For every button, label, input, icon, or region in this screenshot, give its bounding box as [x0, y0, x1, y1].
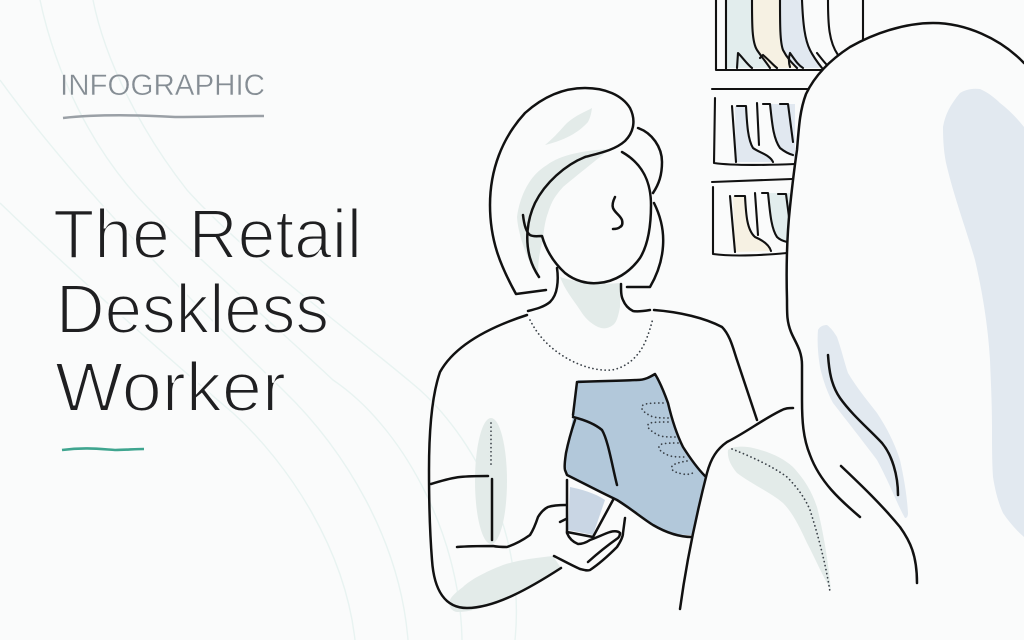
shadow: neck — [560, 277, 620, 328]
boot being held — [565, 373, 705, 537]
shopper figure — [429, 88, 757, 612]
body outline right — [654, 310, 757, 420]
shadow: sleeve — [475, 418, 507, 544]
necklace dotted — [530, 318, 653, 370]
customer arm — [680, 408, 831, 609]
middle shelf — [712, 89, 808, 165]
boot outline — [573, 374, 705, 476]
boot heel fill — [568, 487, 605, 535]
shelves with boots — [712, 0, 863, 256]
stitching — [642, 403, 693, 474]
title: Worker — [55, 348, 286, 426]
top shelf — [716, 0, 863, 70]
shelf colour fills — [727, 0, 822, 252]
hair highlight — [545, 108, 592, 145]
customer figure — [680, 23, 1024, 640]
lower shelf — [712, 179, 792, 256]
right hair — [627, 128, 663, 287]
toe cap — [573, 417, 617, 485]
arm outline — [680, 408, 793, 609]
hair strands — [828, 355, 898, 495]
nose — [613, 197, 622, 229]
label: INFOGRAPHIC: INFOGRAPHIC — [60, 69, 265, 102]
large hair shading — [943, 89, 1024, 537]
sleeve — [431, 476, 492, 540]
customer head and hair — [787, 23, 1024, 640]
body outline left — [429, 315, 561, 608]
title — [53, 195, 362, 426]
shadow: forearm — [449, 556, 561, 612]
dotted seam — [732, 449, 830, 592]
face outline — [523, 152, 651, 283]
hand holding heel — [457, 480, 625, 570]
title: Deskless — [56, 270, 329, 348]
hair outline — [490, 88, 633, 294]
shadow: hair — [517, 149, 610, 277]
boot fill — [565, 373, 705, 535]
green accent underline — [62, 448, 144, 450]
title: The Retail — [53, 195, 362, 273]
head outline — [787, 23, 1024, 517]
hair shading small — [818, 325, 908, 518]
neck and shoulders — [528, 268, 650, 311]
arm shading — [728, 447, 831, 590]
